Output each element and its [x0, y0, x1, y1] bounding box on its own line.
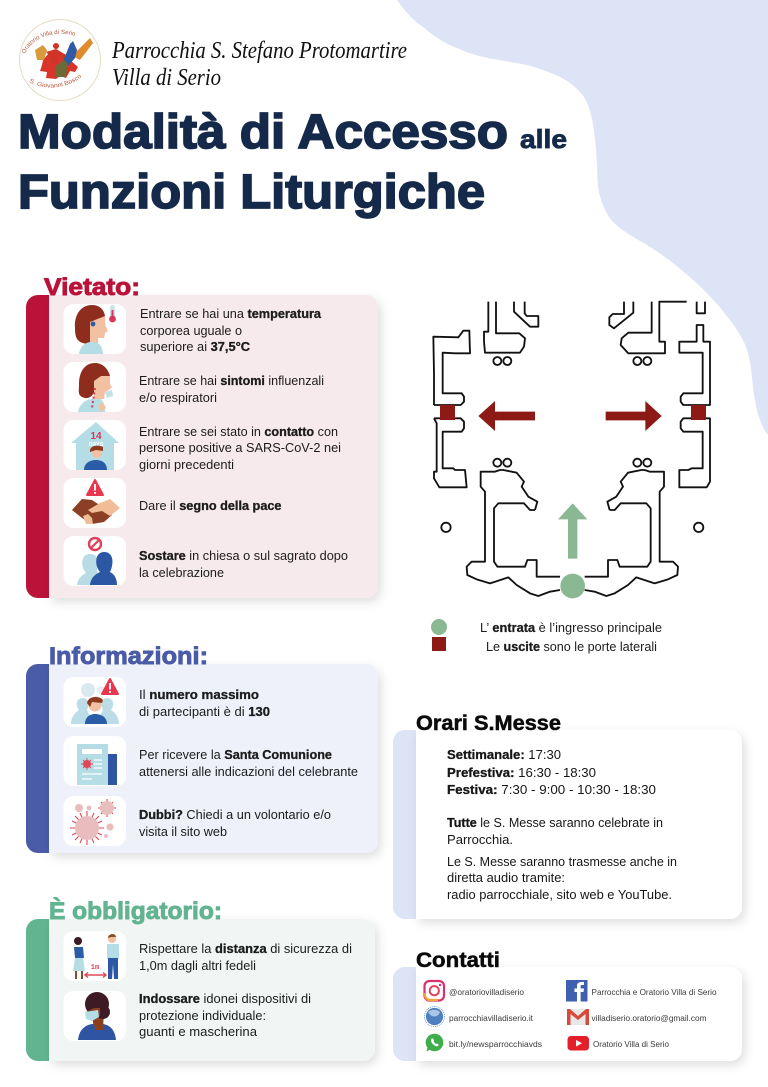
text: distanza [139, 942, 352, 973]
heading: vietato: Vietato: [44, 274, 140, 301]
text: temperatura: superiore ai 37,5°C [140, 340, 250, 354]
schedule: Festiva: 7:30 - 9:00 - 10:30 - 18:30 [447, 782, 656, 797]
text: distanza: Rispettare la distanza di sicurezza di [139, 942, 352, 956]
item: sostare [64, 536, 348, 586]
arrow: exit left [478, 401, 535, 431]
panel: vietato [26, 274, 378, 598]
contact: whatsapp: bit.ly/newsparrocchiavds [449, 1039, 542, 1049]
panel: obbligatorio [26, 897, 375, 1061]
text: dubbi: visita il sito web [139, 825, 227, 839]
note: parrocchia: Tutte le S. Messe saranno celebrate in [447, 815, 663, 830]
text: distanza: 1,0m dagli altri fedeli [139, 959, 256, 973]
exit door right [691, 405, 706, 420]
text: sintomi: e/o respiratori [139, 391, 217, 405]
item: dispositivi [64, 991, 311, 1041]
logo [19, 19, 101, 101]
note: diretta: Le S. Messe saranno trasmesse anche in [447, 854, 677, 869]
item: temperatura [64, 304, 322, 354]
contact: email: villadiserio.oratorio@gmail.com [592, 1013, 706, 1023]
heading: orari: Orari S.Messe [416, 712, 561, 735]
text: sintomi [139, 374, 324, 405]
schedule: Prefestiva: 16:30 - 18:30 [447, 765, 596, 780]
floor plan [420, 302, 710, 602]
title line 1: Modalità di Accesso [18, 106, 508, 159]
item: sintomi [64, 362, 324, 412]
note: diretta [447, 854, 677, 902]
panel: contatti [393, 949, 742, 1061]
title small word: alle [520, 124, 567, 154]
text: sintomi: Entrare se hai sintomi influenzali [139, 374, 324, 388]
logo: Oratorio Villa di Serio [22, 30, 76, 54]
note: diretta: radio parrocchiale, sito web e YouTube. [447, 887, 672, 902]
item: distanza: 1m [91, 964, 99, 972]
text: dispositivi: guanti e mascherina [139, 1025, 257, 1039]
contact: website: parrocchiavilladiserio.it [449, 1013, 534, 1023]
text: dispositivi: Indossare idonei dispositivi di [139, 992, 311, 1006]
text: numero massimo: di partecipanti è di 130 [139, 705, 270, 719]
text: contatto: giorni precedenti [139, 458, 234, 472]
heading: informazioni: Informazioni: [49, 643, 208, 670]
map legend [431, 619, 662, 654]
heading: contatti: Contatti [416, 949, 500, 972]
icon: whatsapp [426, 1034, 443, 1052]
text: dispositivi [139, 992, 311, 1039]
text: santa comunione: Per ricevere la Santa Comunione [139, 748, 332, 762]
contact: facebook: Parrocchia e Oratorio Villa di Serio [592, 987, 717, 997]
contact: youtube: Oratorio Villa di Serio [593, 1039, 669, 1049]
text: sostare: Sostare in chiesa o sul sagrato dopo [139, 549, 348, 563]
text: temperatura: Entrare se hai una temperatura [140, 307, 322, 321]
text: numero massimo: Il numero massimo [139, 688, 259, 702]
icon: youtube [568, 1036, 589, 1050]
icon: facebook [566, 980, 588, 1002]
map legend: Le uscite sono le porte laterali [486, 640, 657, 654]
background blob [397, 0, 768, 435]
note: parrocchia: Parrocchia. [447, 832, 513, 847]
item: santa comunione [64, 736, 358, 786]
text: dispositivi: protezione individuale: [139, 1009, 266, 1023]
arrow: exit right [606, 401, 662, 431]
note: diretta: diretta audio tramite: [447, 870, 565, 885]
logo: S. Giovanni Bosco [30, 75, 81, 88]
title line 2: Funzioni Liturgiche [18, 166, 485, 219]
schedule [447, 747, 656, 797]
text: sostare [139, 549, 348, 580]
text: segno della pace: Dare il segno della pace [139, 499, 282, 513]
text: dubbi [139, 808, 331, 839]
text: contatto: Entrare se sei stato in contatto con [139, 425, 338, 439]
plan walls [433, 302, 710, 596]
icon: instagram [424, 981, 444, 1000]
heading: obbligatorio: È obbligatorio: [49, 897, 222, 925]
icon: gmail [567, 1009, 589, 1025]
map legend: L’ entrata è l’ingresso principale [480, 621, 662, 635]
text: santa comunione: attenersi alle indicazioni del celebrante [139, 765, 358, 779]
schedule: Settimanale: 17:30 [447, 747, 561, 762]
exit door left [440, 405, 455, 420]
item: contatto: 14 [90, 431, 102, 442]
text: santa comunione [139, 748, 358, 779]
text: contatto: persone positive a SARS-CoV-2 nei [139, 441, 341, 455]
text: temperatura: corporea uguale o [140, 324, 242, 338]
parish place: Villa di Serio [112, 65, 221, 91]
note: parrocchia [447, 815, 663, 847]
item: contatto [64, 420, 341, 472]
item: numero massimo [64, 677, 270, 727]
text: dubbi: Dubbi? Chiedi a un volontario e/o [139, 808, 331, 822]
panel: orari [393, 712, 742, 919]
item: contatto: DAYS [89, 442, 104, 448]
item: segno della pace [64, 478, 282, 528]
item: dubbi [64, 796, 331, 846]
parish name: Parrocchia S. Stefano Protomartire [111, 38, 407, 64]
panel: informazioni [26, 643, 378, 853]
text: sostare: la celebrazione [139, 566, 224, 580]
text: temperatura [140, 307, 322, 354]
text: contatto [139, 425, 341, 472]
icon: globe [424, 1006, 444, 1026]
arrow: entrance [558, 503, 587, 559]
entrance marker [560, 574, 585, 598]
contact: instagram: @oratoriovilladiserio [449, 987, 524, 997]
text: numero massimo [139, 688, 270, 719]
item: distanza [64, 931, 352, 981]
